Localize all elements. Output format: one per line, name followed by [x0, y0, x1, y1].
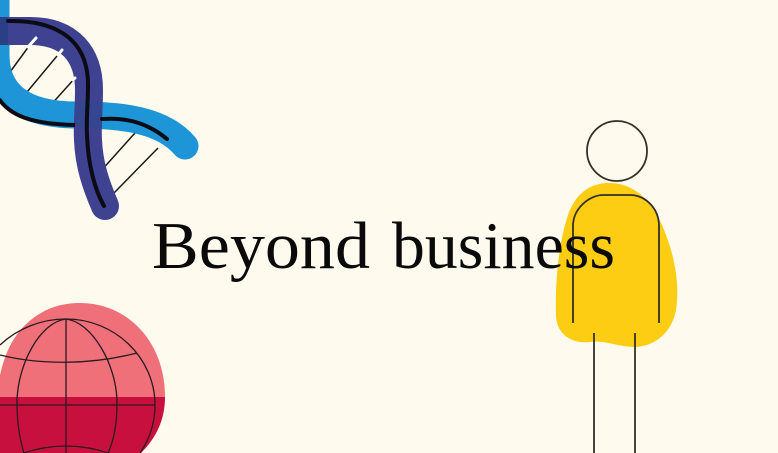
person head	[587, 121, 647, 181]
globe upper disc	[0, 303, 165, 397]
icon: globe	[0, 303, 165, 453]
DNA overlap top-left	[0, 17, 8, 45]
title: Beyond	[152, 209, 370, 283]
DNA rungs	[10, 38, 158, 193]
DNA black line, light strand right	[102, 119, 167, 139]
title: business	[392, 209, 615, 283]
person yellow body blob	[556, 183, 677, 347]
globe lower band	[0, 397, 165, 453]
DNA overlap centre	[76, 102, 102, 128]
DNA black line, light strand left	[0, 99, 75, 125]
DNA black line, dark strand	[8, 21, 104, 206]
person legs	[594, 333, 635, 453]
icon: person	[556, 121, 677, 453]
title	[152, 209, 615, 283]
person outline	[573, 121, 659, 453]
person arms	[573, 195, 659, 323]
icon: DNA helix	[0, 0, 185, 206]
globe grid lines	[0, 319, 155, 453]
DNA white rung tips	[28, 38, 75, 80]
DNA dark blue strand	[0, 31, 105, 206]
DNA light blue strand	[0, 0, 185, 146]
